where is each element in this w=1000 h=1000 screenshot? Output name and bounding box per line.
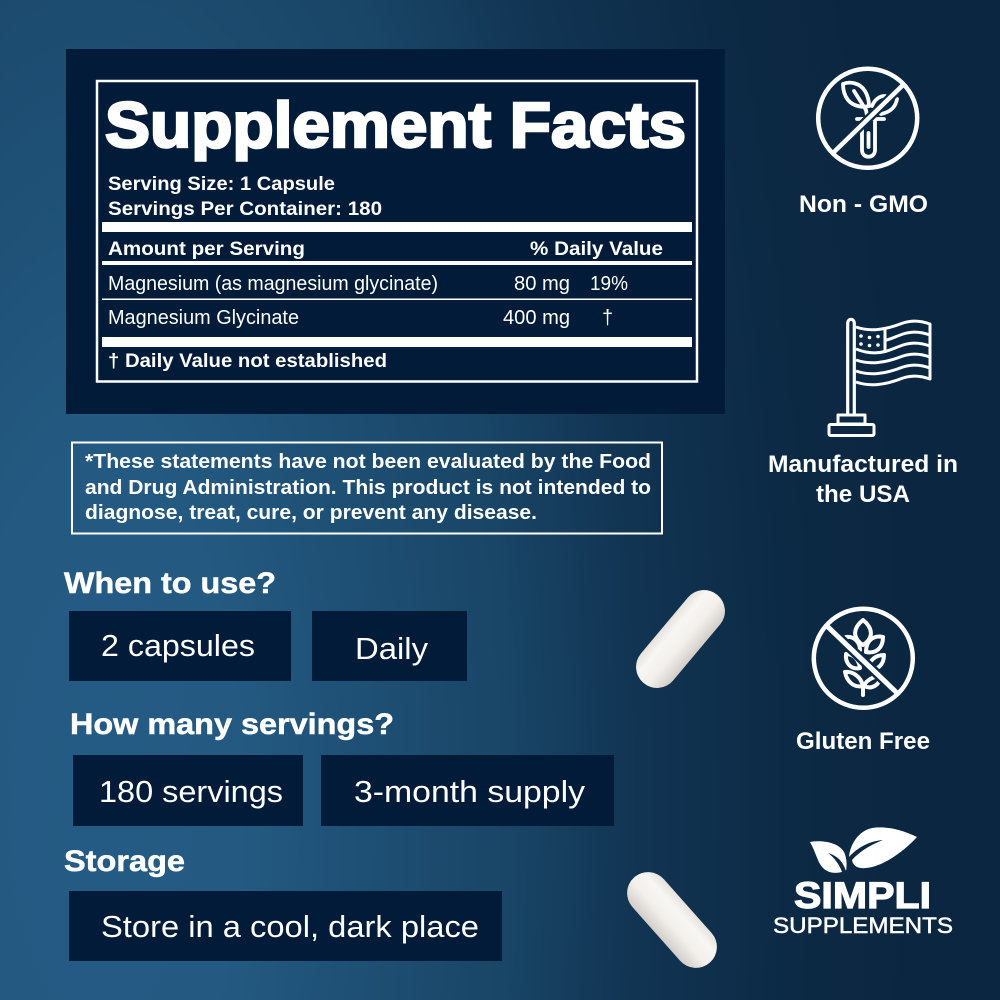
tag: 2 capsules: 2 capsules [101,628,255,663]
servings per container: Servings Per Container: 180 [108,199,382,220]
disclaimer box: *These statements have not been evaluated by the Food [85,450,651,473]
disclaimer box: and Drug Administration. This product is not intended to [85,476,651,499]
heading: how many servings: How many servings? [70,708,394,741]
logo: simpli supplements: SIMPLI [794,875,931,916]
label: manufactured in the usa [768,451,958,508]
icon: gluten free [814,609,913,708]
logo leaves [810,827,917,873]
serving size: Serving Size: 1 Capsule [108,174,335,195]
disclaimer box: diagnose, treat, cure, or prevent any disease. [85,501,537,524]
tag: daily: Daily [355,631,429,666]
table header: daily value: % Daily Value [530,238,663,260]
thick rule bottom [102,337,692,347]
heading: storage: Storage [64,845,185,878]
row: magnesium glycinate: 400 mg [503,307,570,329]
logo: simpli supplements: SUPPLEMENTS [773,913,953,938]
disclaimer box [72,442,662,534]
thick rule top [102,222,692,232]
panel: supplement facts [66,49,725,414]
label: non-gmo: Non - GMO [799,191,928,218]
tag: store in a cool dark place: Store in a cool, dark place [101,909,479,944]
row: magnesium [108,273,628,295]
row: magnesium glycinate [108,307,613,329]
label: manufactured in the usa: the USA [816,481,910,508]
heading: supplement facts: Supplement Facts [105,89,686,161]
row: magnesium: 80 mg [514,273,570,295]
row: magnesium glycinate: Magnesium Glycinate [108,307,299,329]
table header: amount: Amount per Serving [108,238,305,260]
icon: non-gmo [818,69,917,168]
label: manufactured in the usa: Manufactured in [768,451,958,478]
row: magnesium: 19% [590,273,628,295]
footnote: † Daily Value not established [108,350,387,372]
row: magnesium glycinate: † [602,307,613,329]
label: gluten free: Gluten Free [796,728,930,755]
tag: 3-month supply [321,755,614,826]
tag: 180 servings: 180 servings [99,774,283,809]
tag: 2 capsules [69,611,291,681]
capsule top [627,581,734,697]
heading: when to use: When to use? [64,567,276,600]
icon: usa flag [829,319,930,436]
tag: 3-month supply: 3-month supply [354,774,586,809]
tag: daily [312,611,467,681]
logo: simpli supplements [773,827,953,938]
row: magnesium: Magnesium (as magnesium glycinate) [108,273,438,295]
capsule bottom [618,863,726,977]
tag: 180 servings [73,755,303,826]
tag: store in a cool dark place [69,891,502,961]
